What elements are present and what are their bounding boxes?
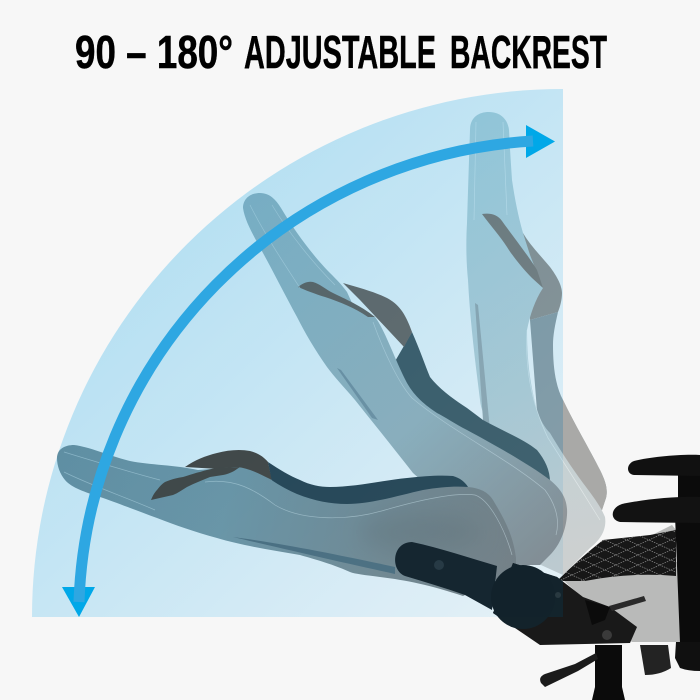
rear base [675, 642, 700, 671]
flat body [57, 445, 516, 596]
backrest: upright position [466, 112, 607, 575]
caster knob [640, 645, 671, 675]
height lever [540, 653, 598, 687]
arrowhead: right [526, 125, 555, 158]
upright mesh outside sector [563, 400, 607, 510]
seat top diamonds [557, 530, 676, 581]
flat body shading [360, 512, 480, 552]
backrest: flat position [57, 445, 516, 596]
chair seat and base [540, 455, 700, 700]
backrest: reclined 135 position [243, 193, 567, 565]
middle mesh panel [390, 332, 550, 482]
flat wing [185, 450, 272, 480]
gas cylinder [592, 645, 625, 700]
bracket bolt [434, 560, 444, 570]
side bracket [395, 542, 497, 610]
upright stitching [474, 122, 600, 520]
middle body [243, 193, 567, 565]
middle leather panel [298, 282, 375, 317]
tilt mechanism [395, 542, 646, 645]
middle stitching [250, 205, 558, 535]
upper armrest [628, 455, 700, 476]
upright groove [475, 303, 490, 430]
middle wing [343, 283, 412, 347]
arrowhead: down [62, 587, 95, 617]
recline lever notch [585, 600, 610, 625]
pivot bolt [555, 592, 561, 598]
title: 90 – 180° [75, 26, 233, 78]
seat edge sliver [650, 525, 676, 536]
quilted seat top [557, 530, 676, 581]
flat mesh panel [268, 462, 468, 510]
title: BACKREST [450, 26, 607, 78]
seat cushion [563, 560, 682, 642]
upright mesh panel [530, 312, 607, 510]
flat leather panel [151, 467, 240, 500]
mechanism plate [493, 563, 637, 645]
blue range sector [32, 89, 563, 617]
middle groove [337, 368, 378, 420]
recline lever [609, 596, 646, 611]
title [75, 26, 607, 78]
range arrow [62, 125, 555, 617]
seat top fill [557, 530, 676, 581]
upright wing [523, 233, 562, 320]
upright leather panel [482, 214, 543, 288]
title: ADJUSTABLE [244, 26, 436, 78]
flat stitching [64, 452, 512, 555]
lower armrest [613, 497, 700, 523]
flat groove [233, 537, 395, 574]
arrow curve [79, 141, 533, 602]
plate bolt [602, 630, 612, 640]
plate tinted part [493, 563, 563, 617]
upright body [466, 112, 605, 575]
pivot disc [491, 565, 555, 629]
armrest post [675, 470, 700, 643]
